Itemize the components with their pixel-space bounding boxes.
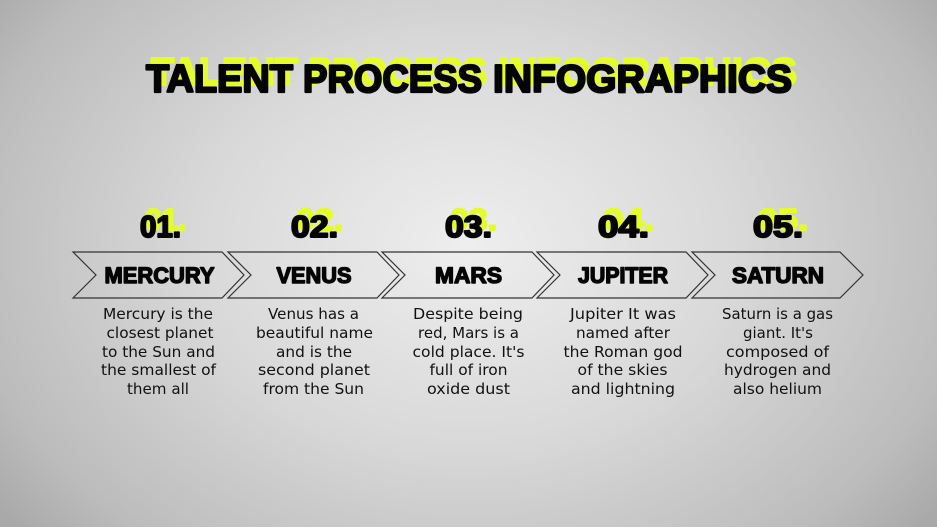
- description Mars: oxide dust: [427, 380, 510, 398]
- number 02: [291, 202, 343, 244]
- arrow 3: [382, 252, 554, 298]
- label Venus: VENUS: [276, 263, 352, 288]
- number 04: [598, 202, 654, 244]
- description Saturn: composed of: [726, 343, 830, 361]
- description Venus: from the Sun: [263, 380, 364, 398]
- number 03: [445, 202, 497, 244]
- number 02: 02.: [296, 202, 343, 237]
- title: INFOGRAPHICS: [493, 58, 792, 101]
- label Mercury: MERCURY: [104, 263, 215, 288]
- step 4: Jupiter: [537, 202, 708, 398]
- description Jupiter: of the skies: [578, 361, 668, 379]
- title: INFOGRAPHICS: [498, 51, 797, 94]
- title: TALENT: [146, 58, 293, 101]
- step 3: Mars: [382, 202, 554, 398]
- title: PROCESS: [308, 51, 487, 94]
- description Venus: beautiful name: [256, 324, 373, 342]
- arrow 5: [692, 252, 863, 298]
- description Saturn: hydrogen and: [724, 361, 831, 379]
- title: PROCESS: [303, 58, 482, 101]
- label Mars: MARS: [435, 263, 502, 288]
- description Venus: and is the: [276, 343, 352, 361]
- description Mars: red, Mars is a: [418, 324, 519, 342]
- description Jupiter: [564, 305, 682, 398]
- arrow 1: [73, 252, 244, 298]
- number 03: 03.: [445, 209, 492, 244]
- description Jupiter: Jupiter It was: [569, 305, 676, 323]
- description Mercury: them all: [127, 380, 189, 398]
- description Mercury: to the Sun and: [102, 343, 215, 361]
- description Jupiter: and lightning: [571, 380, 675, 398]
- step 5: Saturn: [692, 202, 863, 398]
- description Saturn: [722, 305, 833, 398]
- description Mercury: the smallest of: [101, 361, 217, 379]
- number 03: 03.: [450, 202, 497, 237]
- description Mercury: Mercury is the: [103, 305, 213, 323]
- number 05: [753, 202, 808, 244]
- step 1: Mercury: [73, 202, 244, 398]
- description Mercury: closest planet: [106, 324, 214, 342]
- step 2: Venus: [228, 202, 399, 398]
- description Venus: second planet: [258, 361, 370, 379]
- description Jupiter: named after: [576, 324, 671, 342]
- arrow 2: [228, 252, 399, 298]
- title: TALENT: [151, 51, 298, 94]
- label Saturn: SATURN: [732, 263, 824, 288]
- label Jupiter: JUPITER: [578, 263, 668, 288]
- description Saturn: giant. It's: [743, 324, 813, 342]
- number 04: 04.: [603, 202, 654, 237]
- description Saturn: Saturn is a gas: [722, 305, 833, 323]
- number 05: 05.: [753, 209, 803, 244]
- number 02: 02.: [291, 209, 338, 244]
- description Saturn: also helium: [733, 380, 822, 398]
- description Mars: cold place. It's: [412, 343, 525, 361]
- description Venus: [256, 305, 373, 398]
- description Mercury: [101, 305, 217, 398]
- number 04: 04.: [598, 209, 649, 244]
- number 01: 01.: [140, 209, 181, 244]
- description Jupiter: the Roman god: [564, 343, 682, 361]
- number 05: 05.: [758, 202, 808, 237]
- description Mars: Despite being: [413, 305, 523, 323]
- number 01: 01.: [145, 202, 186, 237]
- description Mars: [412, 305, 525, 398]
- title: [146, 51, 797, 101]
- arrow 4: [537, 252, 708, 298]
- description Venus: Venus has a: [268, 305, 359, 323]
- description Mars: full of iron: [430, 361, 508, 379]
